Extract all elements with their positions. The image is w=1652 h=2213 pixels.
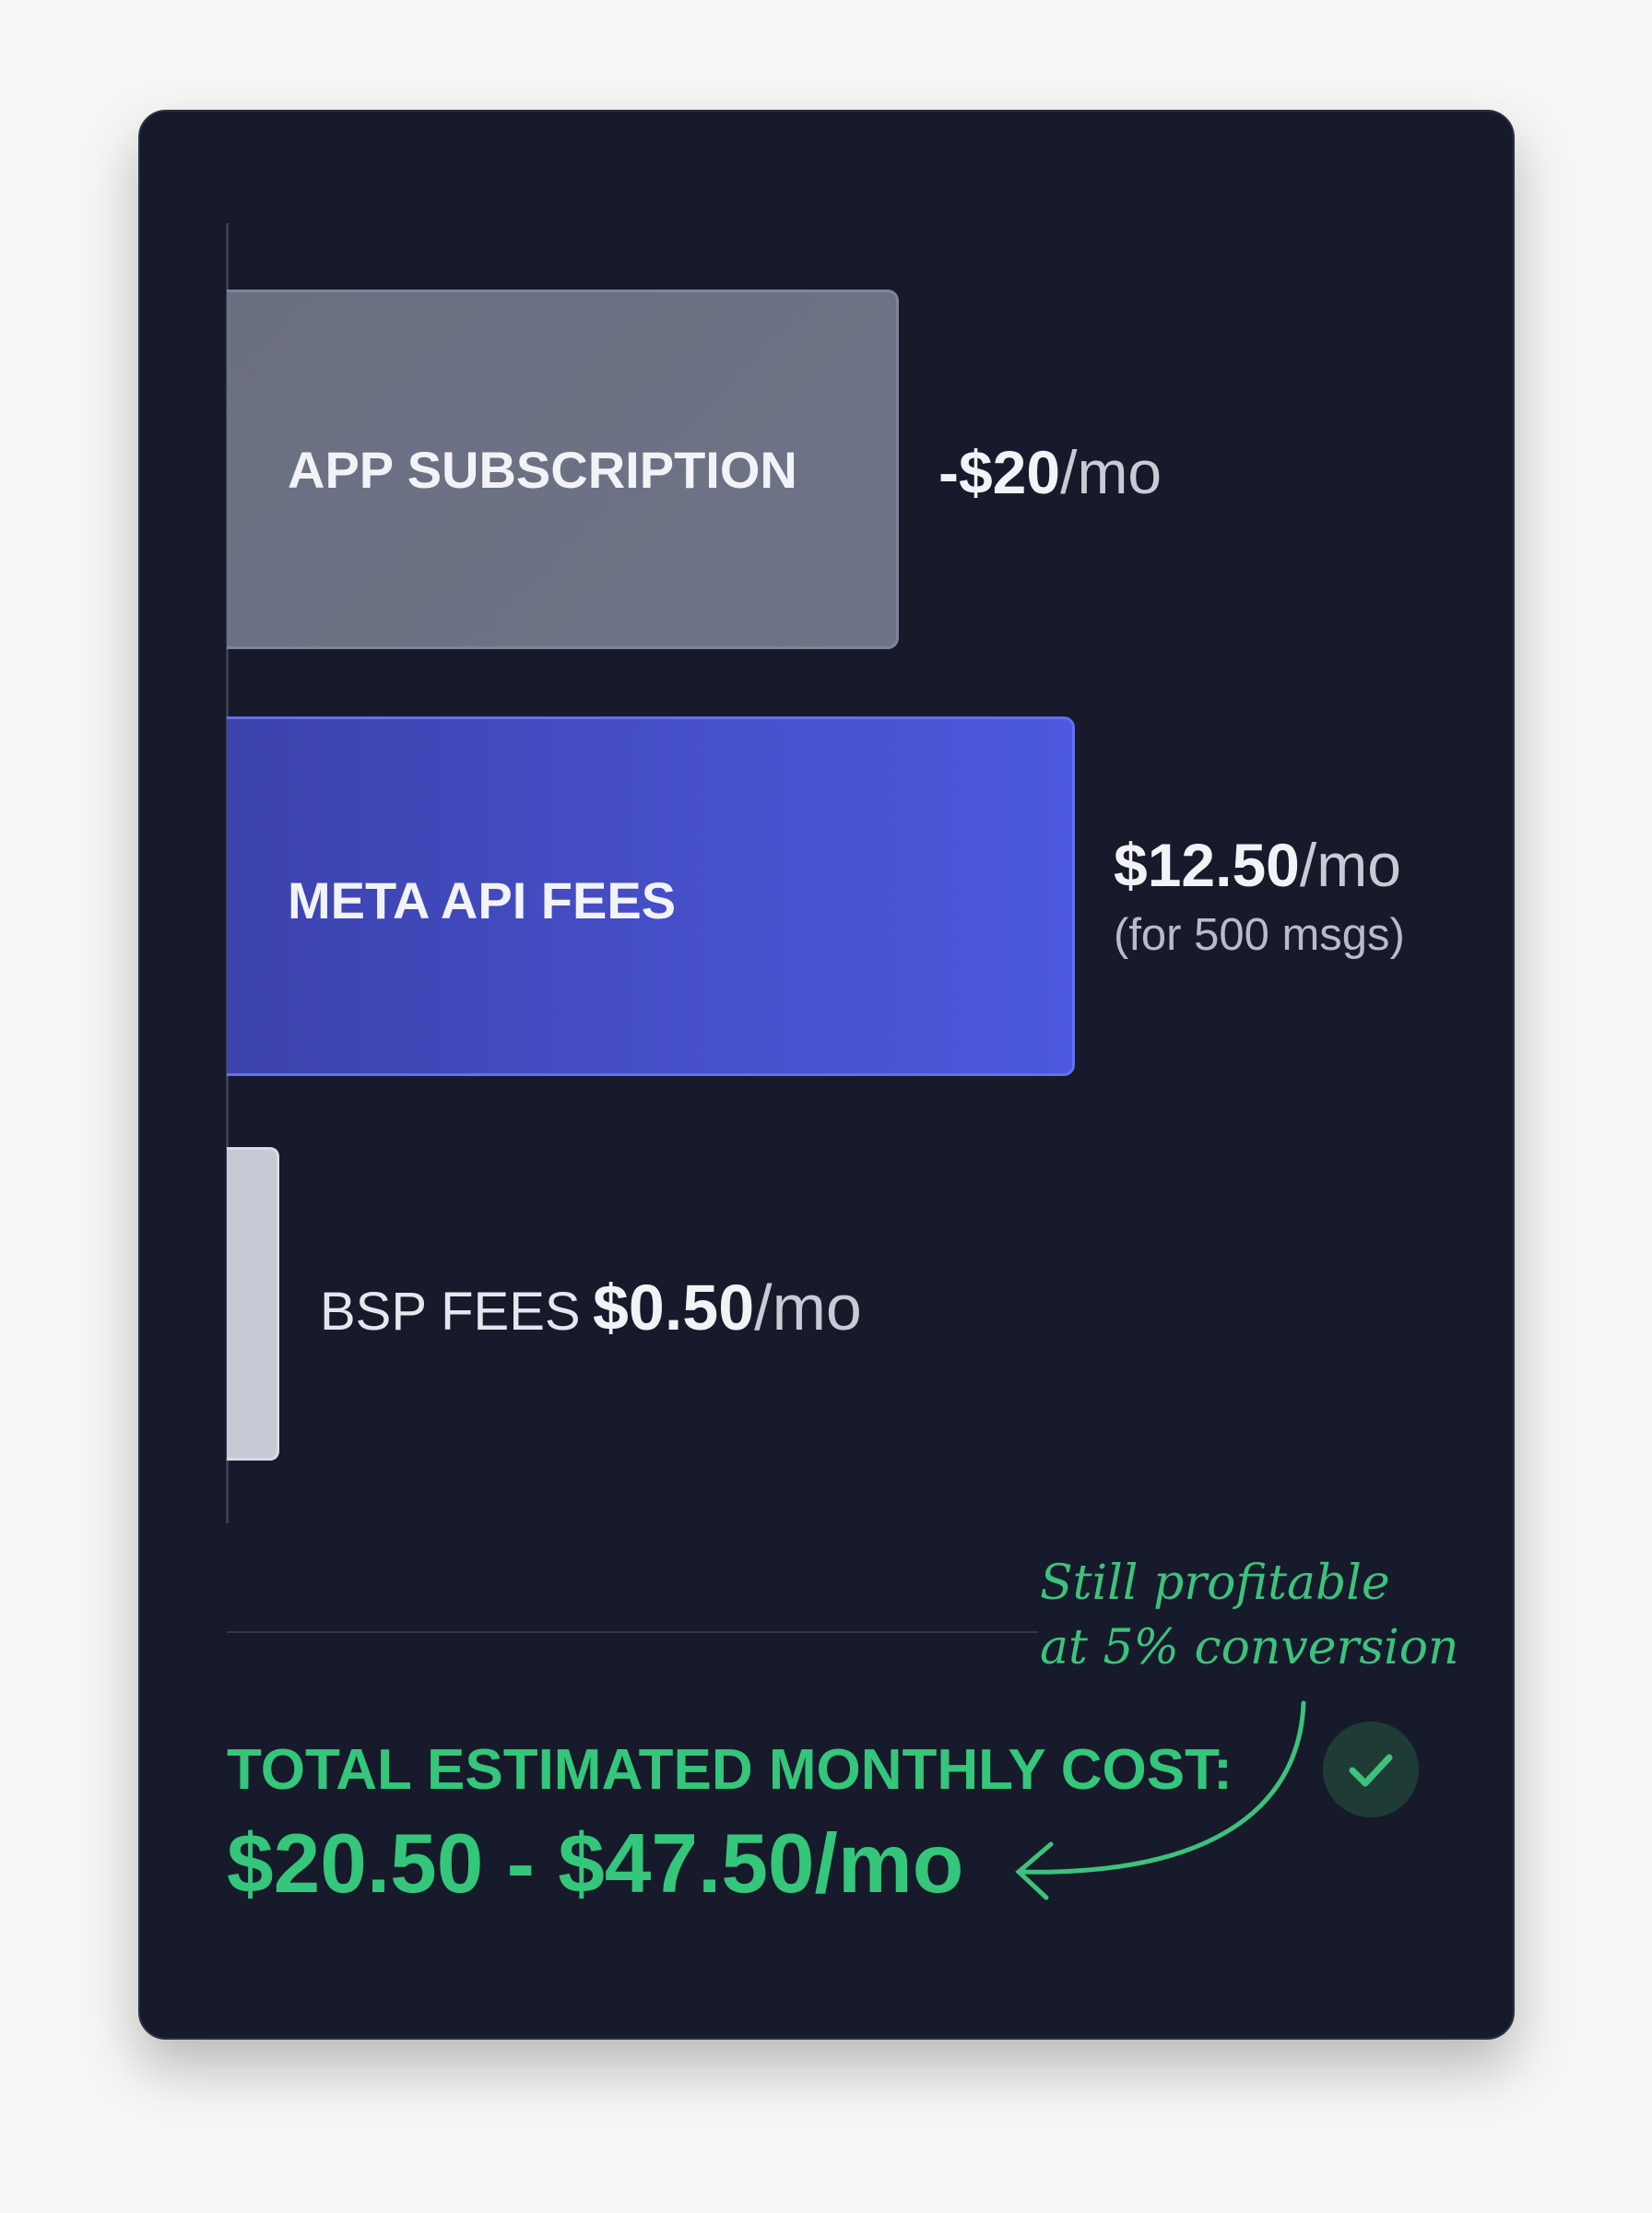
label: meta api fees: META API FEES (288, 871, 676, 929)
value: meta api fees: $12.50/mo (1114, 831, 1401, 899)
total value: $20.50 - $47.50/mo (227, 1817, 963, 1911)
bar: app subscription (227, 290, 899, 649)
bar: meta api fees (227, 716, 1075, 1076)
total heading: TOTAL ESTIMATED MONTHLY COST: (227, 1738, 1233, 1802)
card panel (138, 110, 1515, 2040)
icon: check circle (1323, 1722, 1419, 1817)
value: app subscription: -$20/mo (938, 438, 1162, 506)
label and value: bsp fees: BSP FEES $0.50/mo (320, 1272, 862, 1343)
handwritten callout: Still profitable (1040, 1556, 1390, 1611)
bar: bsp fees (227, 1147, 279, 1461)
value: meta api fees (1114, 831, 1405, 960)
label: app subscription: APP SUBSCRIPTION (288, 441, 797, 499)
handwritten callout: at 5% conversion (1040, 1620, 1458, 1675)
divider (227, 1631, 1038, 1633)
axis line (226, 223, 229, 1523)
note: 500 msgs: (for 500 msgs) (1114, 910, 1405, 960)
handwritten callout (1040, 1556, 1458, 1675)
